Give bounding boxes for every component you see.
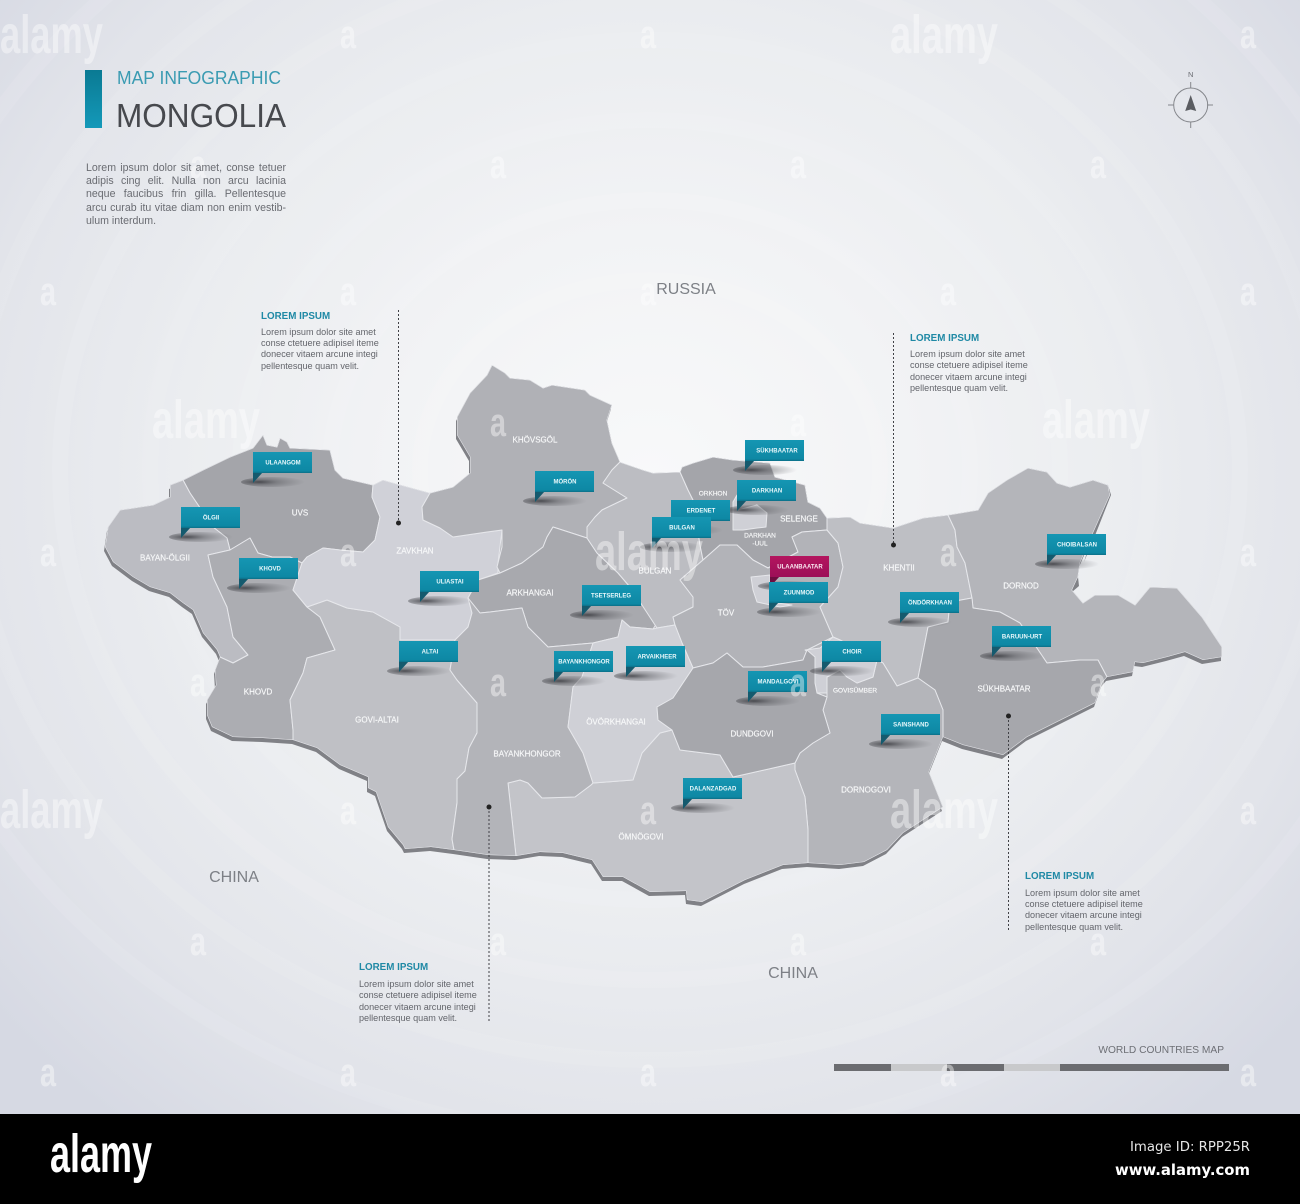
callout: lower left: conse ctetuere adipisel iteme	[359, 990, 477, 1000]
regions	[100, 360, 1230, 905]
watermarks: a	[340, 13, 357, 57]
intro paragraph: ulum interdum.	[86, 215, 156, 227]
tag: Olgii: ÖLGII	[203, 514, 219, 522]
tag: Choir	[810, 641, 881, 676]
country label: Russia: RUSSIA	[656, 281, 716, 298]
region labels: KHENTII	[883, 564, 915, 572]
tag: Baruun-Urt	[980, 626, 1051, 661]
tag: Mandalgovi	[736, 671, 807, 706]
region: Ulaanbaatar	[751, 575, 792, 607]
callout: lower right: pellentesque quam velit.	[1025, 922, 1123, 932]
intro paragraph	[86, 162, 286, 227]
watermarks: a	[940, 531, 957, 575]
callout: lower right: donecer vitaem arcune integi	[1025, 910, 1142, 920]
tag: Choibalsan	[1035, 534, 1106, 569]
watermarks: a	[1240, 270, 1257, 314]
region: Omnogovi	[508, 730, 808, 902]
region labels: KHOVD	[244, 688, 272, 696]
footer image id: Image ID: RPP25R	[1130, 1139, 1250, 1155]
region labels: DORNOD	[1003, 582, 1039, 590]
region: Govisumber	[805, 637, 877, 693]
callout: lower right: LOREM IPSUM	[1025, 871, 1094, 882]
watermarks: a	[340, 1051, 357, 1095]
region: Tov	[673, 530, 843, 668]
watermarks: a	[1240, 531, 1257, 575]
tag: Dalanzadgad	[671, 778, 742, 813]
callout: upper left: conse ctetuere adipisel iteme	[261, 338, 379, 348]
intro paragraph: adipis cing elit. Nulla non arcu lacinia	[86, 175, 286, 187]
watermarks: a	[940, 1051, 957, 1095]
tag: Sainshand: SAINSHAND	[893, 722, 930, 728]
watermarks: a	[340, 531, 357, 575]
tag: Mandalgovi: MANDALGOVI	[758, 680, 799, 686]
region: Dornod	[948, 468, 1222, 677]
watermarks: a	[490, 143, 507, 187]
region: Bayankhongor	[450, 598, 593, 856]
callout: upper left: pellentesque quam velit.	[261, 361, 359, 371]
region: Sukhbaatar	[918, 598, 1107, 755]
tag: Bulgan: BULGAN	[669, 526, 695, 532]
watermarks: a	[640, 789, 657, 833]
region labels: ORKHON	[699, 490, 728, 498]
watermarks: alamy	[0, 780, 103, 840]
footer url: www.alamy.com	[1115, 1161, 1250, 1179]
watermarks: a	[1090, 920, 1107, 964]
watermarks: a	[1240, 1051, 1257, 1095]
watermarks: a	[790, 920, 807, 964]
tag: Sukhbaatar	[733, 440, 804, 475]
tag: Bayankhongor: BAYANKHONGOR	[558, 660, 610, 666]
footer bar	[0, 1114, 1300, 1204]
region: Arkhangai	[468, 527, 657, 647]
region labels: SELENGE	[780, 514, 818, 524]
callout: lower left: donecer vitaem arcune integi	[359, 1002, 476, 1012]
tag: Sukhbaatar: SÜKHBAATAR	[756, 448, 798, 454]
map of Mongolia	[100, 360, 1230, 906]
map extrusion	[104, 369, 1221, 906]
tag: Ulaanbaatar capital	[758, 556, 829, 591]
region: Dornogovi	[795, 660, 943, 865]
region: Khovsgol	[422, 365, 627, 573]
tag: Altai: ALTAI	[422, 650, 439, 656]
footer logo: alamy	[50, 1124, 152, 1184]
tag: Khovd: KHOVD	[259, 566, 281, 572]
city tags	[169, 440, 1106, 813]
region labels: DUNDGOVI	[730, 730, 774, 738]
region labels: GOVISÜMBER	[833, 686, 877, 694]
tag: Altai	[387, 641, 458, 676]
watermarks: alamy	[890, 5, 998, 65]
region: Khovd	[207, 538, 335, 740]
callout: upper left	[261, 310, 401, 526]
region: Dundgovi	[657, 650, 830, 777]
tag: Sainshand	[869, 714, 940, 749]
tag: Zuunmod: ZUUNMOD	[784, 590, 815, 596]
callout: upper left: Lorem ipsum dolor site amet	[261, 327, 376, 337]
tag: Moron	[523, 471, 594, 506]
subtitle: MAP INFOGRAPHIC	[117, 68, 281, 88]
callout: upper right	[891, 333, 1028, 548]
watermarks: alamy	[595, 522, 703, 582]
callout: upper right: Lorem ipsum dolor site amet	[910, 349, 1025, 359]
watermarks: a	[1090, 143, 1107, 187]
tag: Ondorkhaan: ÖNDÖRKHAAN	[908, 600, 952, 606]
tag: Erdenet: ERDENET	[687, 508, 716, 514]
tag: Choibalsan: CHOIBALSAN	[1057, 542, 1097, 548]
region labels: ÖVÖRKHANGAI	[586, 718, 646, 726]
watermarks: alamy	[152, 390, 260, 450]
tag: Tsetserleg: TSETSERLEG	[591, 594, 631, 600]
region labels: SÜKHBAATAR	[977, 684, 1031, 694]
watermarks: a	[40, 270, 57, 314]
tag: Arvaikheer: ARVAIKHEER	[637, 654, 677, 660]
compass north arrow	[1185, 95, 1196, 111]
region: Selenge	[680, 457, 827, 568]
tag: Olgii	[169, 507, 240, 542]
scale bar	[834, 1064, 1229, 1071]
region labels: ZAVKHAN	[396, 546, 434, 556]
intro paragraph: Lorem ipsum dolor sit amet, conse tetuer	[86, 162, 286, 174]
region labels: DORNOGOVI	[841, 786, 891, 794]
watermarks: a	[1240, 789, 1257, 833]
region labels: BAYAN-ÖLGII	[140, 554, 190, 562]
callout: upper right: pellentesque quam velit.	[910, 383, 1008, 393]
title accent bar	[85, 70, 102, 128]
watermarks: alamy	[0, 5, 103, 65]
callout: upper right: conse ctetuere adipisel iteme	[910, 360, 1028, 370]
title block	[85, 68, 286, 134]
watermarks: a	[190, 143, 207, 187]
watermarks: a	[640, 1051, 657, 1095]
compass N: N	[1188, 70, 1193, 79]
watermarks: a	[490, 920, 507, 964]
region: Khentii	[820, 515, 972, 686]
watermarks: a	[790, 661, 807, 705]
intro paragraph: arcu curab itu vitae diam non enim vestib-	[86, 202, 286, 214]
watermarks: a	[790, 143, 807, 187]
tag: Darkhan	[725, 480, 796, 515]
watermarks: a	[1090, 661, 1107, 705]
callout: lower left: pellentesque quam velit.	[359, 1013, 457, 1023]
tag: Uliastai: ULIASTAI	[436, 580, 464, 586]
region: Ovorkhangai	[568, 620, 693, 783]
scale caption: WORLD COUNTRIES MAP	[1098, 1045, 1224, 1056]
watermarks: a	[640, 13, 657, 57]
region labels: GOVI-ALTAI	[355, 716, 399, 724]
callout: lower right: Lorem ipsum dolor site amet	[1025, 888, 1140, 898]
region labels: BAYANKHONGOR	[493, 750, 561, 758]
region labels: TÖV	[718, 608, 735, 618]
tag: Bayankhongor	[542, 651, 613, 686]
region labels: -UUL	[752, 540, 768, 548]
region labels: ARKHANGAI	[506, 588, 554, 598]
tag: Ulaangom	[241, 452, 312, 487]
watermarks: a	[40, 1051, 57, 1095]
country label: China south: CHINA	[768, 965, 818, 982]
callout: lower left	[359, 804, 492, 1023]
callout: upper left: donecer vitaem arcune integi	[261, 349, 378, 359]
watermarks: alamy	[1042, 390, 1150, 450]
callout: lower right: conse ctetuere adipisel iteme	[1025, 899, 1143, 909]
tag: Ulaanbaatar capital: ULAANBAATAR	[777, 564, 823, 570]
tag: Dalanzadgad: DALANZADGAD	[690, 786, 737, 792]
tag: Baruun-Urt: BARUUN-URT	[1002, 634, 1042, 640]
callout: upper left: LOREM IPSUM	[261, 311, 330, 322]
region labels: ÖMNÖGOVI	[619, 832, 663, 842]
compass	[1168, 70, 1213, 128]
tag: Ulaangom: ULAANGOM	[265, 460, 301, 466]
tag: Moron: MÖRÖN	[554, 478, 576, 486]
watermarks: a	[490, 401, 507, 445]
tag: Bulgan	[640, 517, 711, 552]
region: Darkhan-Uul	[733, 495, 767, 530]
region labels: KHÖVSGÖL	[513, 436, 558, 444]
watermarks: a	[340, 270, 357, 314]
region labels: UVS	[292, 508, 308, 518]
callout: upper right: donecer vitaem arcune integi	[910, 372, 1027, 382]
tag: Khovd	[227, 558, 298, 593]
region: Bulgan	[587, 462, 703, 628]
callout: lower left: Lorem ipsum dolor site amet	[359, 979, 474, 989]
intro paragraph: neque faucibus frin gilla. Pellentesque	[86, 188, 286, 200]
watermarks: a	[640, 270, 657, 314]
region labels: DARKHAN	[744, 532, 776, 540]
country label: China west: CHINA	[209, 869, 259, 886]
tag: Uliastai	[408, 571, 479, 606]
tag: Erdenet	[659, 500, 730, 535]
callout: lower right	[1006, 714, 1143, 932]
tag: Tsetserleg	[570, 585, 641, 620]
region labels	[140, 436, 1039, 842]
watermarks: a	[940, 270, 957, 314]
tag: Zuunmod	[757, 582, 828, 617]
watermarks: a	[790, 401, 807, 445]
watermarks: a	[340, 789, 357, 833]
watermarks: a	[490, 661, 507, 705]
region: Zavkhan	[293, 480, 502, 640]
tag: Arvaikheer	[614, 646, 685, 681]
watermarks: a	[190, 661, 207, 705]
region: Bayan-Olgii	[105, 480, 248, 663]
region: Govi-Altai	[290, 600, 477, 850]
tag: Darkhan: DARKHAN	[752, 488, 782, 494]
region: Uvs	[183, 435, 380, 563]
tag: Choir: CHOIR	[842, 650, 862, 656]
watermarks: a	[190, 920, 207, 964]
callout: lower left: LOREM IPSUM	[359, 962, 428, 973]
region labels: BULGAN	[639, 566, 672, 576]
watermarks: alamy	[890, 780, 998, 840]
tag: Ondorkhaan	[888, 592, 959, 627]
watermarks: a	[1240, 13, 1257, 57]
watermarks: a	[40, 531, 57, 575]
title: MONGOLIA	[116, 97, 286, 134]
callout: upper right: LOREM IPSUM	[910, 333, 979, 344]
